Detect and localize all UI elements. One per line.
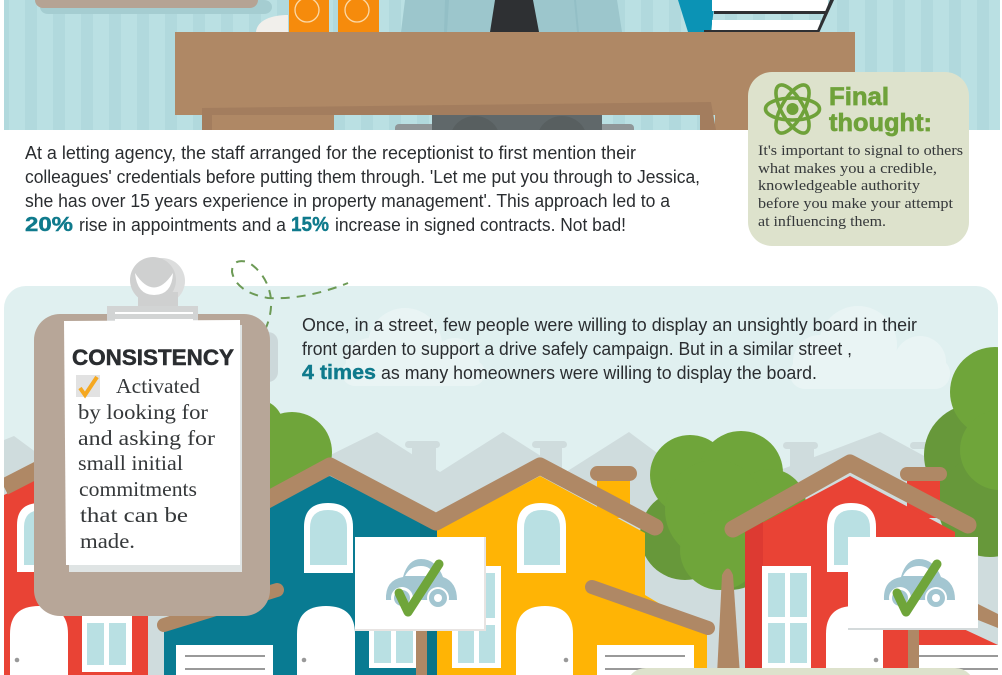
desk bbox=[175, 32, 855, 130]
text block: street campaign: Once, in a street, few people were willing to display an unsightly board in their bbox=[302, 315, 917, 335]
house: yellow bbox=[437, 466, 707, 675]
text block: letting agency: colleagues' credentials before putting them through. 'Let me put you through to Jessica, bbox=[25, 167, 700, 187]
paper bbox=[64, 320, 242, 572]
house: red left bbox=[4, 462, 148, 675]
house: teal bbox=[164, 476, 437, 675]
chair bbox=[395, 115, 634, 130]
sign: left bbox=[355, 537, 486, 675]
icon: car with check bbox=[884, 559, 955, 612]
text block: letting agency: increase in signed contracts. Not bad! bbox=[335, 215, 626, 235]
text block: street campaign bbox=[302, 315, 917, 384]
vase bbox=[678, 0, 715, 32]
heading: final thought bbox=[829, 83, 932, 137]
roofs: teal and yellow bbox=[164, 466, 708, 628]
clipboard text: Activated bbox=[116, 374, 201, 398]
clipboard text: and asking for bbox=[78, 426, 215, 450]
books bbox=[704, 0, 834, 33]
text block: letting agency: 20% bbox=[25, 214, 73, 236]
sky bbox=[4, 286, 998, 472]
background houses bbox=[4, 432, 998, 675]
text block: street campaign: 4 times bbox=[302, 362, 376, 384]
person with tie bbox=[401, 0, 622, 32]
panel: consistency clipboard bbox=[34, 257, 278, 616]
clipboard board bbox=[34, 314, 270, 616]
final thought text: before you make your attempt bbox=[758, 196, 953, 212]
icon: car with check bbox=[386, 559, 457, 612]
icon: atom bbox=[766, 80, 820, 138]
heading: consistency: CONSISTENCY bbox=[72, 345, 234, 370]
striped wall bbox=[4, 0, 1000, 130]
shelf bbox=[35, 0, 272, 14]
clouds bbox=[342, 306, 950, 389]
dashed flight path bbox=[232, 261, 348, 330]
panel: street scene bbox=[4, 286, 1002, 675]
final thought text: It's important to signal to others bbox=[758, 143, 963, 159]
icon: white object on desk bbox=[256, 15, 288, 32]
final thought text: knowledgeable authority bbox=[758, 178, 921, 194]
final thought text: what makes you a credible, bbox=[758, 161, 937, 177]
clipboard text bbox=[78, 374, 215, 553]
text block: letting agency: she has over 15 years experience in property management'. This approach led to a bbox=[25, 191, 671, 211]
clip bbox=[107, 257, 198, 332]
clipboard shadow bbox=[255, 332, 278, 382]
tree right bbox=[924, 347, 1002, 557]
binders bbox=[289, 0, 379, 32]
panel: final thought bbox=[748, 72, 969, 246]
text block: street campaign: as many homeowners were willing to display the board. bbox=[381, 363, 817, 383]
text block: letting agency bbox=[25, 143, 700, 236]
tree centre bbox=[640, 431, 806, 675]
panel: office scene bbox=[4, 0, 1000, 130]
icon: checkbox bbox=[76, 375, 100, 397]
heading: final thought: Final bbox=[829, 83, 889, 111]
text block: letting agency: At a letting agency, the staff arranged for the receptionist to first mention their bbox=[25, 143, 636, 163]
text block: street campaign: front garden to support a drive safely campaign. But in a similar street , bbox=[302, 339, 852, 359]
final thought text bbox=[758, 143, 963, 230]
final thought text: at influencing them. bbox=[758, 214, 886, 230]
clipboard text: commitments bbox=[79, 477, 197, 501]
clipboard text: small initial bbox=[78, 451, 183, 475]
text block: letting agency: 15% bbox=[291, 214, 329, 236]
text block: letting agency: rise in appointments and a bbox=[79, 215, 287, 235]
clipboard text: by looking for bbox=[78, 400, 208, 424]
house: red right bbox=[733, 463, 998, 675]
heading: final thought: thought: bbox=[829, 109, 932, 137]
clipboard text: that can be bbox=[80, 503, 188, 527]
tree left bbox=[270, 403, 332, 489]
panel: bottom card bbox=[626, 668, 975, 675]
clipboard text: made. bbox=[80, 529, 135, 553]
sign: right bbox=[848, 537, 978, 675]
